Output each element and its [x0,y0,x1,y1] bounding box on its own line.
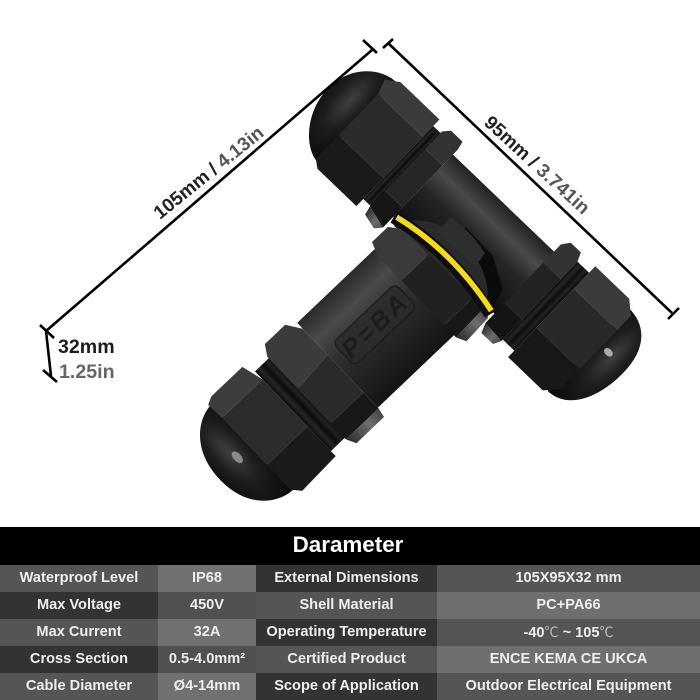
table row: waterproof level [0,565,700,592]
yellow seal ring [394,209,497,316]
hex nut: lower stem [260,318,385,447]
top bar of connector [279,48,663,423]
table row: cross section: ENCE KEMA CE UKCA [490,651,647,667]
lower branch of connector [172,186,523,530]
table row: max current [0,619,700,646]
hex nut: lower right [479,239,584,347]
table row: max current: 32A [194,624,220,640]
table row: cable diameter: Outdoor Electrical Equipment [466,678,671,694]
threads: lower [255,357,346,451]
gland nut: lower [205,363,337,497]
dimension: 95mm length [383,39,679,319]
table row: waterproof level: 105X95X32 mm [515,570,622,586]
bar body [393,155,555,314]
table heading [0,527,700,565]
highlight: lower right dome [602,346,614,358]
logo plate [333,284,417,366]
line and ticks [383,39,679,319]
label: 105mm / 4.13in [150,122,268,224]
highlight: lower dome [230,449,245,465]
table row: max voltage: Max Voltage [37,597,121,613]
logo text: P=BA [335,286,415,364]
threads: lower right [503,262,589,351]
line and ticks [46,40,377,331]
dimension: 105mm length [46,40,377,331]
table row: cable diameter [0,673,700,700]
gland nut: lower right [508,266,639,399]
hex nut: upper [361,126,464,233]
line and ticks [40,325,57,382]
dome: upper gland [286,51,396,162]
stem body [297,249,455,408]
dome: lower right gland [548,307,658,420]
table row: waterproof level: Waterproof Level [20,570,138,586]
table row: max voltage [0,592,700,619]
dimension: 32mm height [40,325,115,383]
table row: max voltage: PC+PA66 [536,597,601,613]
table heading: Darameter [293,532,403,557]
dome: lower gland [178,404,293,521]
table row: cross section [0,646,700,673]
table row: cross section: Cross Section [30,651,128,667]
table row: max current: Max Current [36,624,122,640]
junction cap [394,191,518,318]
label: 1.25in: 1.25in [59,361,115,383]
table row: cable diameter: Cable Diameter [26,678,132,694]
table row: max voltage: 450V [190,597,224,613]
table row: cable diameter: Ø4-14mm [174,678,240,694]
table row: max voltage: Shell Material [299,597,394,613]
table row: cross section: 0.5-4.0mm² [169,651,245,667]
threads: upper [363,126,441,207]
label: 32mm: 32mm [58,336,115,358]
table row: max current: -40℃ ~ 105℃ [523,624,614,641]
table row: cross section: Certified Product [287,651,406,667]
junction shadow [431,221,519,311]
gland nut: upper [308,73,439,206]
table row: max current: Operating Temperature [266,624,427,640]
table row: waterproof level: External Dimensions [274,570,419,586]
table row: cable diameter: Scope of Application [274,678,419,694]
label: 95mm / 3.741in [480,112,593,219]
hex nut: near ring [368,217,493,345]
table row: waterproof level: IP68 [192,570,222,586]
